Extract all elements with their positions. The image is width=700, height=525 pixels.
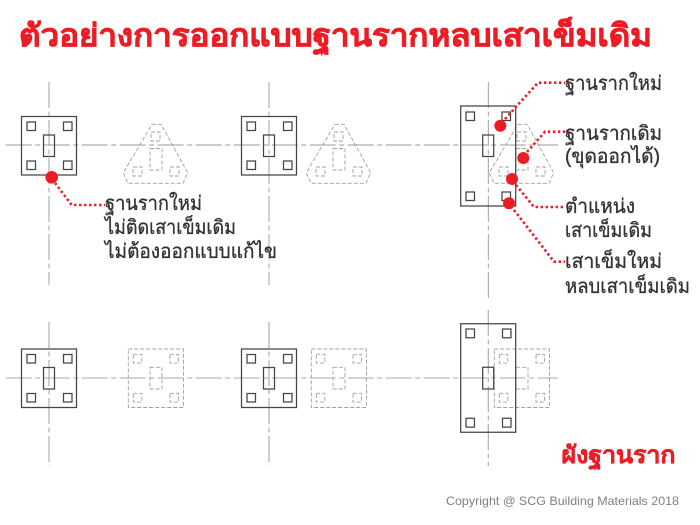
callout: new footing [494,72,662,132]
callout: new pile: เสาเข็มใหม่ [565,248,662,273]
callout: old pile position: ตำแหน่ง [565,196,635,218]
footing: new right enlarged [461,106,516,206]
footing: old left [123,124,188,183]
title: ตัวอย่างการออกแบบฐานรากหลบเสาเข็มเดิม [19,16,652,56]
footing: old right [489,124,554,183]
copyright: Copyright @ SCG Building Materials 2018 [446,494,679,508]
footing: new right bottom [461,324,516,432]
footing: new middle bottom [242,349,296,408]
heading: foundation plan: ผังฐานราก [562,442,676,471]
callout: old footing: ฐานรากเดิม [565,123,662,145]
callout: new footing: ฐานรากใหม่ [565,72,662,95]
footing: new left [22,116,76,175]
callout: left footing: ไม่ต้องออกแบบแก้ไข [103,240,277,263]
callout: old footing [517,123,662,169]
footing: old middle bottom [311,349,366,408]
panel: plan of new footing, top row [6,82,558,300]
callout: left footing: ฐานรากใหม่ [105,192,202,215]
callout: new pile: หลบเสาเข็มเดิม [565,273,690,298]
callout: left footing [45,171,277,263]
footing: old right bottom [494,349,550,408]
callout: new pile [503,197,690,298]
footing: old left bottom [128,349,184,408]
footing: new middle [242,116,296,175]
footing: old middle [306,124,371,183]
callout: old footing: (ขุดออกได้) [565,145,660,169]
footing: new left bottom [22,349,76,408]
callout: left footing: ไม่ติดเสาเข็มเดิม [103,214,236,239]
callout: old pile position: เสาเข็มเดิม [565,217,652,242]
panel: foundation plan, bottom row [6,310,558,466]
callout: old pile position [506,173,652,242]
